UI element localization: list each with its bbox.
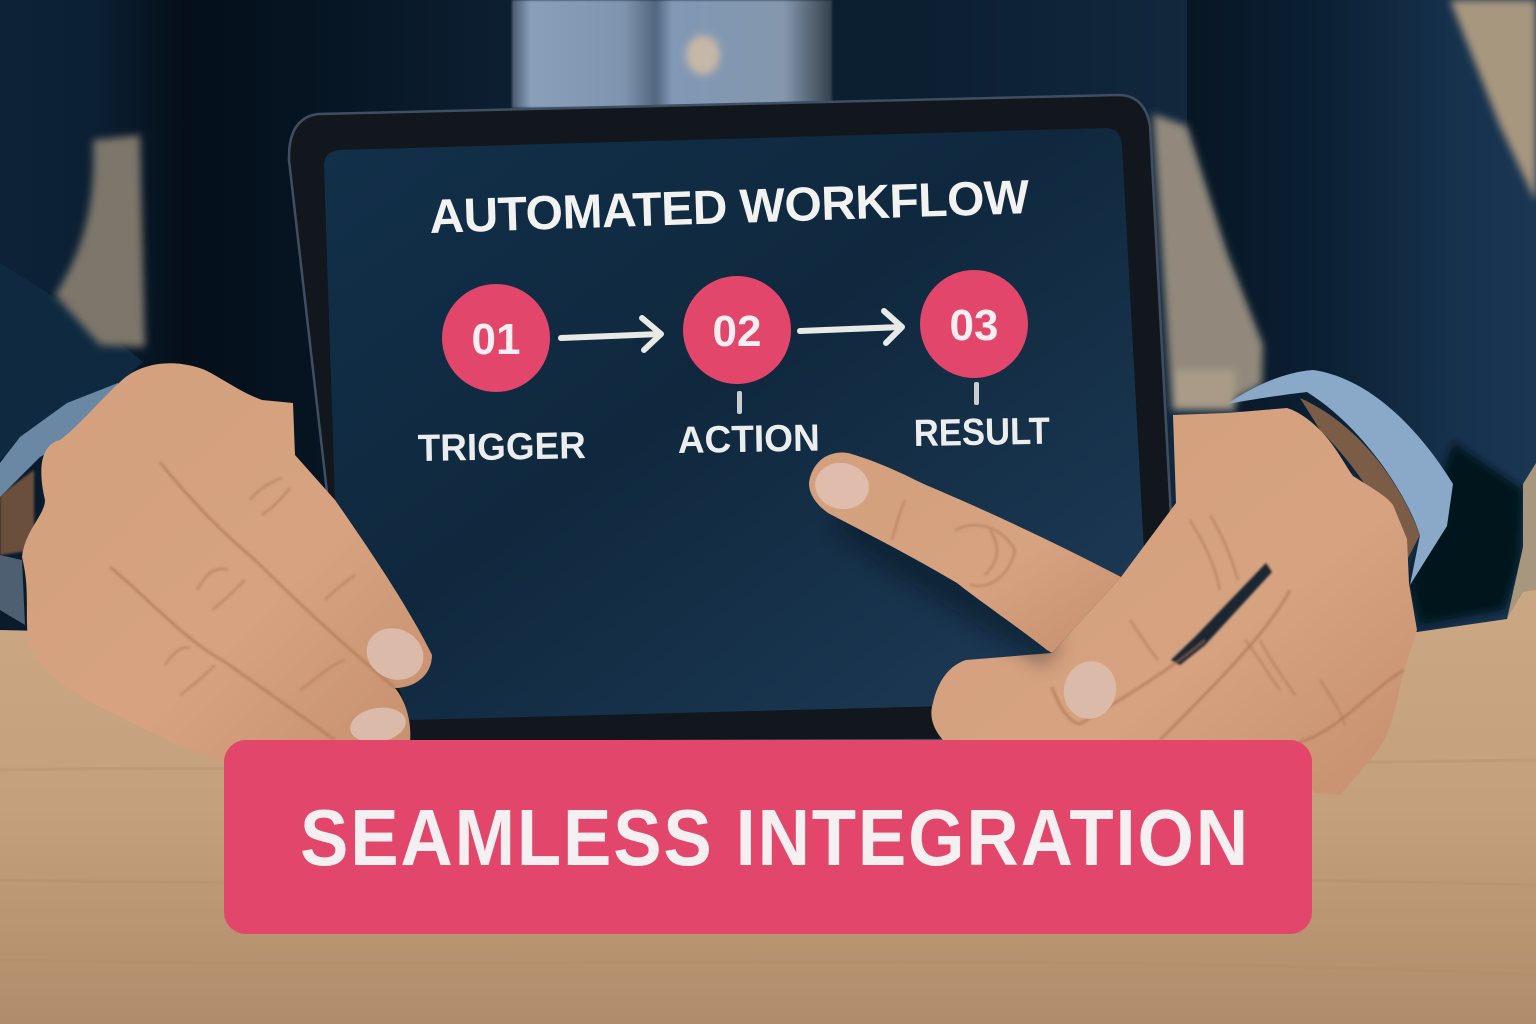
workflow diagram — [417, 171, 1050, 470]
step 01 trigger: TRIGGER — [417, 425, 586, 470]
wall below right sleeve — [1507, 463, 1536, 619]
navy suit jacket — [0, 0, 1536, 640]
left shirt cuff and wrist — [0, 383, 125, 625]
left hand — [22, 363, 432, 762]
right wrist — [1300, 398, 1420, 560]
banner: seamless integration — [224, 740, 1312, 934]
background wall top right — [1450, 0, 1536, 202]
step 01 trigger — [417, 284, 586, 470]
tablet screen — [324, 128, 1145, 720]
step 03 result — [913, 270, 1050, 455]
background gaps beside arms — [55, 114, 1263, 410]
tablet body — [289, 95, 1176, 742]
dress shirt — [512, 0, 832, 108]
arrow 02 to 03 — [800, 311, 902, 343]
step 02 action — [677, 276, 820, 462]
step 02 action: ACTION — [677, 418, 820, 462]
step 03 result: RESULT — [913, 411, 1050, 455]
pointing index finger — [809, 453, 1121, 665]
step 03 result: 03 — [950, 301, 998, 350]
step 02 action: 02 — [713, 307, 761, 356]
banner: seamless integration: SEAMLESS INTEGRATION — [300, 793, 1250, 882]
right hand — [931, 408, 1417, 795]
screen title: AUTOMATED WORKFLOW — [429, 171, 1031, 244]
wooden table — [0, 590, 1536, 1024]
right shirt cuff — [1227, 370, 1453, 585]
arrow 01 to 02 — [561, 318, 661, 350]
step 01 trigger: 01 — [472, 315, 520, 364]
